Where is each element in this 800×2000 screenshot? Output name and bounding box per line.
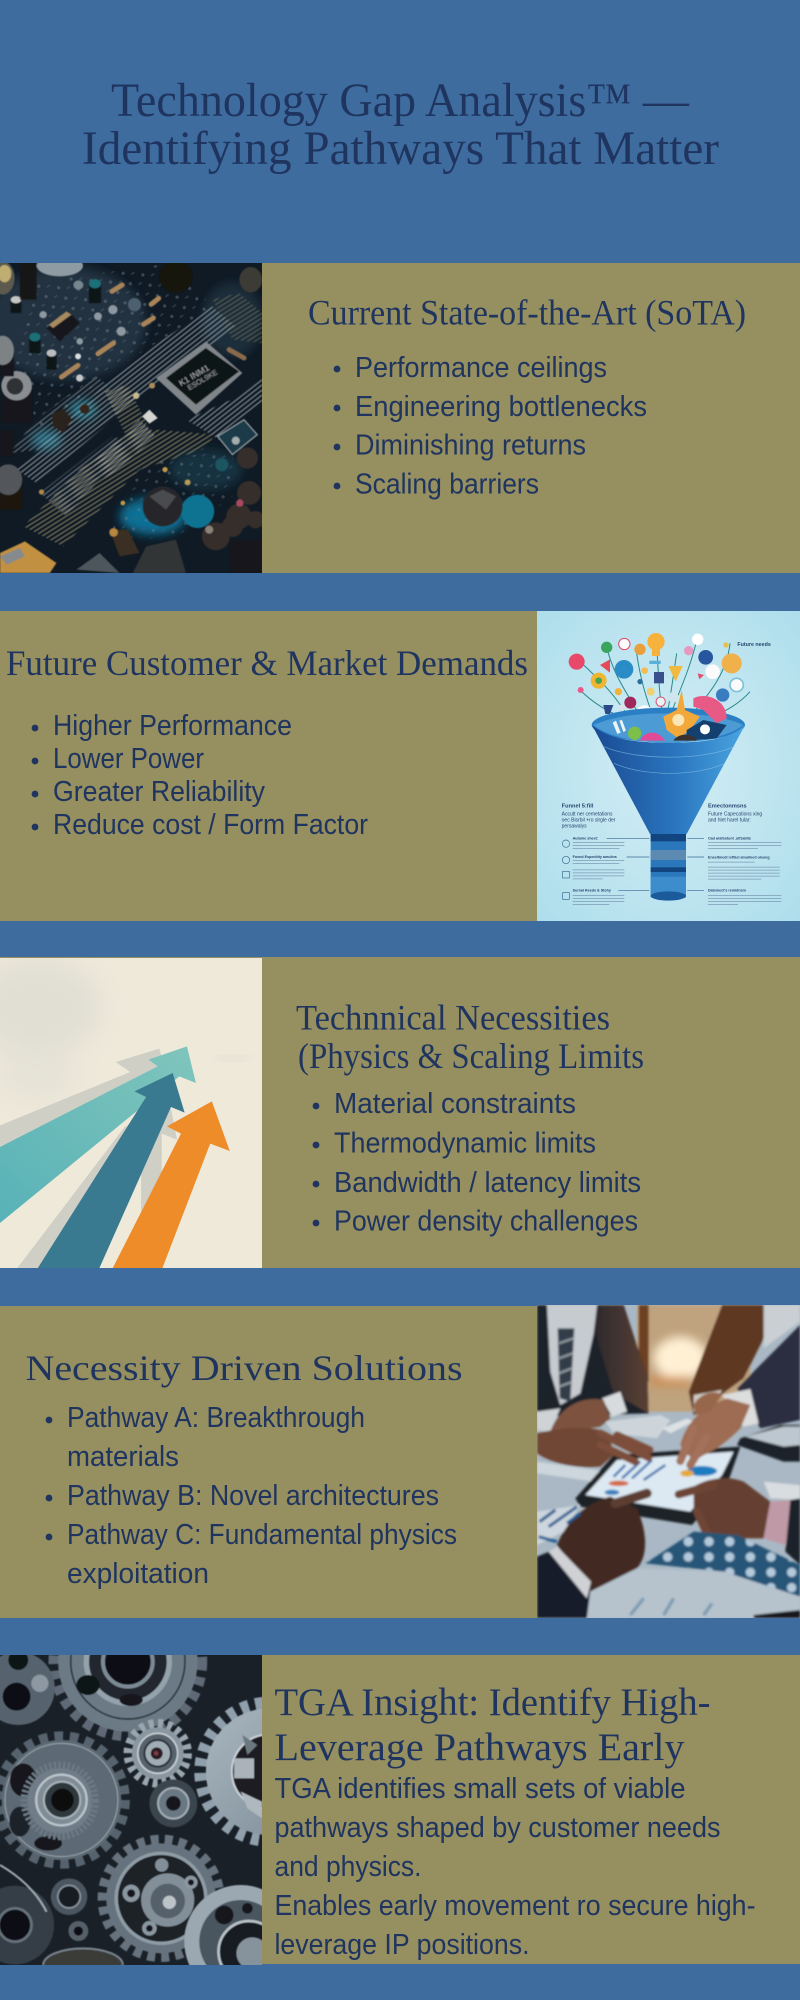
panel: current state of the art bbox=[0, 255, 800, 573]
right large gear bbox=[201, 1703, 337, 1840]
bullet list: market demands: Reduce cost / Form Factor bbox=[53, 809, 368, 841]
heading: technical necessities: Technnical Necessities bbox=[296, 998, 610, 1038]
bullet list: physical limits: Thermodynamic limits bbox=[334, 1128, 596, 1160]
window bbox=[637, 1305, 750, 1412]
bullet list: physical limits: Material constraints bbox=[334, 1088, 576, 1120]
funnel labels: Future needs bbox=[737, 642, 771, 648]
capacitors bbox=[2, 386, 32, 423]
body text: TGA insight bbox=[274, 1773, 756, 1961]
image: funnel infographic: Datemect's remidnsm bbox=[708, 889, 747, 893]
bullet list: market demands: Greater Reliability bbox=[53, 776, 265, 808]
lower right cluster bbox=[202, 447, 264, 550]
bullet list: market demands bbox=[32, 710, 368, 841]
bullet list: SoTA limits: Scaling barriers bbox=[355, 468, 539, 500]
pink cuff and sleeve bbox=[764, 1500, 794, 1545]
body text: TGA insight: pathways shaped by customer needs bbox=[274, 1812, 720, 1844]
left large gear bbox=[0, 1737, 125, 1863]
image: circuit board photo bbox=[0, 263, 262, 573]
image: circuit board photo: K1 INM1 bbox=[177, 362, 211, 388]
bullet list: pathways: Pathway A: Breakthrough bbox=[67, 1402, 365, 1434]
bullet list: physical limits bbox=[313, 1088, 641, 1238]
components bbox=[46, 311, 80, 341]
bullet list: pathways bbox=[46, 1402, 457, 1590]
bottom left cluster bbox=[0, 1886, 54, 1964]
image: business team reviewing charts bbox=[537, 1305, 800, 1618]
image: funnel infographic: Surnal Reeds & Stohy bbox=[573, 889, 612, 893]
image: circuit board photo: ESOL9KE bbox=[186, 368, 219, 392]
bullet list: pathways: Pathway C: Fundamental physics bbox=[67, 1519, 457, 1551]
body text: TGA insight: leverage IP positions. bbox=[274, 1929, 530, 1961]
body text: TGA insight: Enables early movement ro secure high- bbox=[274, 1890, 756, 1922]
resistors bbox=[61, 285, 244, 377]
lower left hand and sleeve bbox=[557, 1497, 645, 1592]
bottom centre gear bbox=[103, 1840, 219, 1957]
tablet bbox=[575, 1447, 740, 1525]
image: funnel infographic: Future Capecations xing bbox=[708, 811, 762, 817]
image: funnel infographic: persawalys bbox=[562, 823, 587, 829]
heading: future customer and market demands: Future Customer & Market Demands bbox=[6, 643, 528, 683]
image: funnel infographic: Emectonmsns bbox=[708, 803, 747, 809]
heading: TGA insight: Leverage Pathways Early bbox=[274, 1726, 685, 1769]
panel: TGA insight bbox=[0, 1588, 800, 1998]
bullet list: physical limits: Power density challenges bbox=[334, 1206, 638, 1238]
heading: technical necessities: (Physics & Scaling Limits bbox=[298, 1036, 644, 1076]
image: funnel infographic: oec Bisrbil +ro slrgle der bbox=[562, 817, 616, 823]
image: rising arrows bbox=[0, 958, 262, 1268]
funnel rim bbox=[592, 708, 745, 742]
heading: TGA insight: TGA Insight: Identify High- bbox=[274, 1681, 710, 1724]
image: funnel infographic: Accutt ner cemetations bbox=[562, 811, 613, 817]
image: metal gears bbox=[0, 1655, 262, 1965]
image: funnel infographic: Cad arafostunt .ulf1abits bbox=[708, 837, 751, 841]
heading: TGA insight bbox=[274, 1681, 710, 1769]
chip bbox=[156, 341, 242, 415]
funnel cone bbox=[592, 725, 745, 834]
image: funnel infographic: and hlet harel tular: bbox=[708, 817, 751, 823]
hands bbox=[550, 1399, 610, 1432]
funnel stem bbox=[651, 834, 686, 897]
teal arrow bbox=[0, 1046, 196, 1223]
bullet list: market demands: Lower Power bbox=[53, 743, 204, 775]
image: funnel infographic: Autome sheet: bbox=[573, 837, 598, 841]
papers on the table bbox=[605, 1415, 670, 1438]
bottom right gear bbox=[184, 1885, 297, 1998]
top left gear bbox=[0, 1652, 55, 1725]
bullet list: SoTA limits: Performance ceilings bbox=[355, 352, 607, 384]
funnel stems of ideas bbox=[580, 640, 750, 720]
bullet list: SoTA limits: Diminishing returns bbox=[355, 430, 586, 462]
body text: TGA insight: TGA identifies small sets of viable bbox=[274, 1773, 686, 1805]
image: funnel infographic bbox=[537, 611, 800, 921]
gold component bbox=[0, 541, 56, 573]
body text: TGA insight: and physics. bbox=[274, 1851, 422, 1883]
title: Identifying Pathways That Matter bbox=[82, 122, 719, 175]
image: funnel infographic: Enseltmedi reffaci amulined ulsong bbox=[708, 856, 770, 860]
small dark gear bbox=[149, 1779, 197, 1827]
top gear bbox=[54, 1588, 202, 1736]
bullet list: pathways: Pathway B: Novel architectures bbox=[67, 1480, 439, 1512]
bullet list: market demands: Higher Performance bbox=[53, 710, 292, 742]
dark teal arrow bbox=[37, 1073, 185, 1269]
bullet list: SoTA limits bbox=[334, 352, 647, 500]
bullet list: SoTA limits: Engineering bottlenecks bbox=[355, 391, 647, 423]
image: funnel infographic: Funnel 5:fill bbox=[562, 803, 594, 809]
gray arrow shadows bbox=[0, 1049, 166, 1147]
heading: necessity driven solutions: Necessity Driven Solutions bbox=[26, 1348, 462, 1388]
bullet list: pathways: exploitation bbox=[67, 1558, 209, 1590]
bullet list: physical limits: Bandwidth / latency limits bbox=[334, 1167, 641, 1199]
title: Technology Gap Analysis™ — bbox=[111, 74, 690, 127]
left suit bbox=[537, 1305, 649, 1417]
panel: future customer and market demands bbox=[0, 611, 800, 921]
orange arrow bbox=[112, 1101, 230, 1269]
title bbox=[82, 74, 719, 175]
left shirt and tie bbox=[547, 1305, 597, 1405]
image: funnel infographic: Fuvnd Especitity amulins bbox=[573, 855, 617, 859]
heading: technical necessities bbox=[296, 998, 644, 1076]
printed charts bbox=[537, 1505, 580, 1545]
small centre gear bbox=[128, 1723, 188, 1783]
right suits bbox=[689, 1305, 767, 1415]
heading: current state of the art: Current State-of-the-Art (SoTA) bbox=[308, 292, 746, 332]
panel: necessity driven solutions bbox=[0, 1305, 800, 1618]
panel: technical necessities bbox=[0, 957, 800, 1269]
bullet list: pathways: materials bbox=[67, 1441, 179, 1473]
